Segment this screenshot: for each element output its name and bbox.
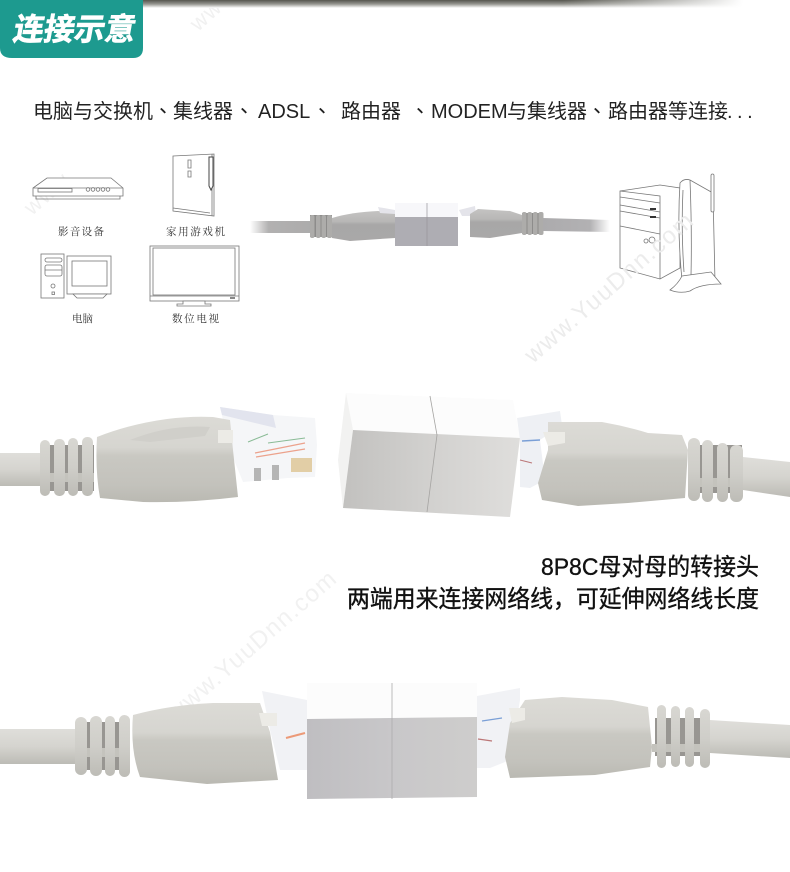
- left cable: [0, 453, 42, 486]
- adapter: [338, 393, 520, 517]
- title text: 连接示意: [11, 12, 139, 47]
- right cable: [543, 218, 610, 232]
- caption line 2: 两端用来连接网络线，可延伸网络线长度: [347, 586, 759, 613]
- right cable: [710, 720, 790, 758]
- connection description text: [33, 100, 757, 123]
- connection description text: 、: [153, 101, 173, 123]
- watermark over tower: www.YuuDnn.com: [518, 207, 700, 369]
- top shadow bar: [143, 0, 743, 8]
- right plug body: [538, 422, 688, 506]
- watermarks: nc: [179, 182, 215, 218]
- adapter: [395, 203, 458, 217]
- left plug body: [132, 703, 278, 784]
- right clear head: [477, 688, 520, 768]
- icon: router: [670, 174, 721, 292]
- connection description text: 集线器: [173, 100, 233, 123]
- connection description text: 、: [312, 101, 332, 123]
- connection description text: 路由器: [341, 100, 401, 123]
- icon: computer tower: [620, 185, 680, 279]
- left cable: [250, 221, 312, 233]
- left plug: [332, 211, 395, 241]
- watermarks: www.YuuDnn.com: [161, 565, 343, 727]
- right boot: [688, 438, 743, 502]
- icon: game console: [173, 154, 214, 216]
- connection description text: ADSL: [258, 101, 310, 123]
- right RJ45 clear head: [517, 411, 562, 488]
- watermarks: [18, 0, 350, 727]
- right cable: [743, 457, 790, 497]
- connection description text: 电脑与交换机: [33, 100, 153, 123]
- icon: flat TV: [150, 246, 239, 306]
- left plug body: [96, 417, 238, 502]
- left cable: [0, 729, 75, 764]
- caption: 家用游戏机: 家用游戏机: [166, 225, 226, 238]
- icon: desktop computer: [41, 254, 111, 298]
- scene 2: plugs inserted into adapter: [0, 683, 790, 799]
- left boot: [310, 215, 332, 238]
- caption: 电脑: 电脑: [72, 312, 94, 325]
- connection description text: MODEM: [431, 101, 508, 123]
- connection diagram cable and adapter: [250, 203, 610, 246]
- connection description text: 与集线器: [507, 100, 587, 123]
- icon: DVD player: [33, 178, 123, 199]
- left boot: [75, 715, 130, 777]
- connection description text: ...: [727, 101, 757, 123]
- connection description text: 、: [234, 101, 254, 123]
- connection description text: 、: [587, 101, 607, 123]
- adapter: [307, 683, 477, 799]
- connection description text: 、: [410, 101, 430, 123]
- right plug body: [505, 697, 652, 778]
- right plug: [459, 206, 476, 216]
- caption line 1: 8P8C母对母的转接头: [541, 554, 759, 581]
- caption: 影音设备: 影音设备: [58, 225, 104, 238]
- left boot: [40, 437, 94, 496]
- right boot: [652, 705, 710, 768]
- left clear head: [262, 691, 307, 770]
- right boot: [522, 212, 544, 235]
- left RJ45 clear head: [220, 407, 317, 482]
- watermarks: www: [18, 167, 75, 220]
- title badge: [0, 0, 143, 58]
- connection description text: 路由器等连接: [608, 100, 728, 123]
- scene 1: two plugs and adapter apart: [0, 393, 790, 517]
- product caption: [347, 554, 759, 613]
- caption: 数位电视: 数位电视: [172, 312, 220, 325]
